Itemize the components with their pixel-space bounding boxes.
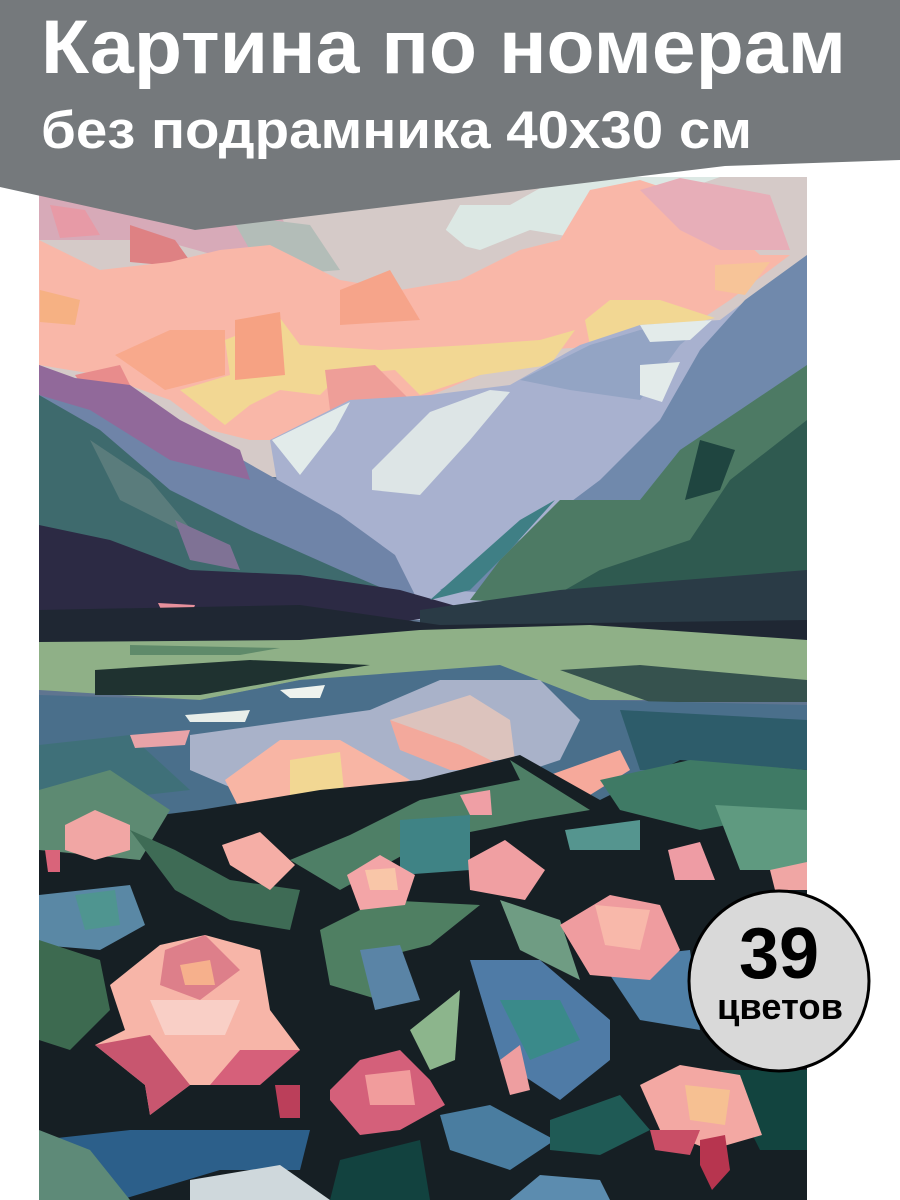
painting base <box>39 477 807 705</box>
painting: mountain lake with lotuses <box>39 177 807 1200</box>
title: Картина по номерам <box>41 5 846 90</box>
badge label: цветов <box>717 986 843 1027</box>
shore <box>39 605 807 702</box>
foreground water and leaves <box>39 755 807 1200</box>
sky <box>39 177 807 477</box>
header banner <box>0 0 900 230</box>
lake <box>39 665 807 814</box>
lotus flowers <box>45 790 807 1190</box>
badge: 39 colours <box>689 891 869 1071</box>
mountains <box>39 255 807 640</box>
badge number: 39 <box>739 914 819 994</box>
subtitle: без подрамника 40х30 см <box>41 101 752 160</box>
